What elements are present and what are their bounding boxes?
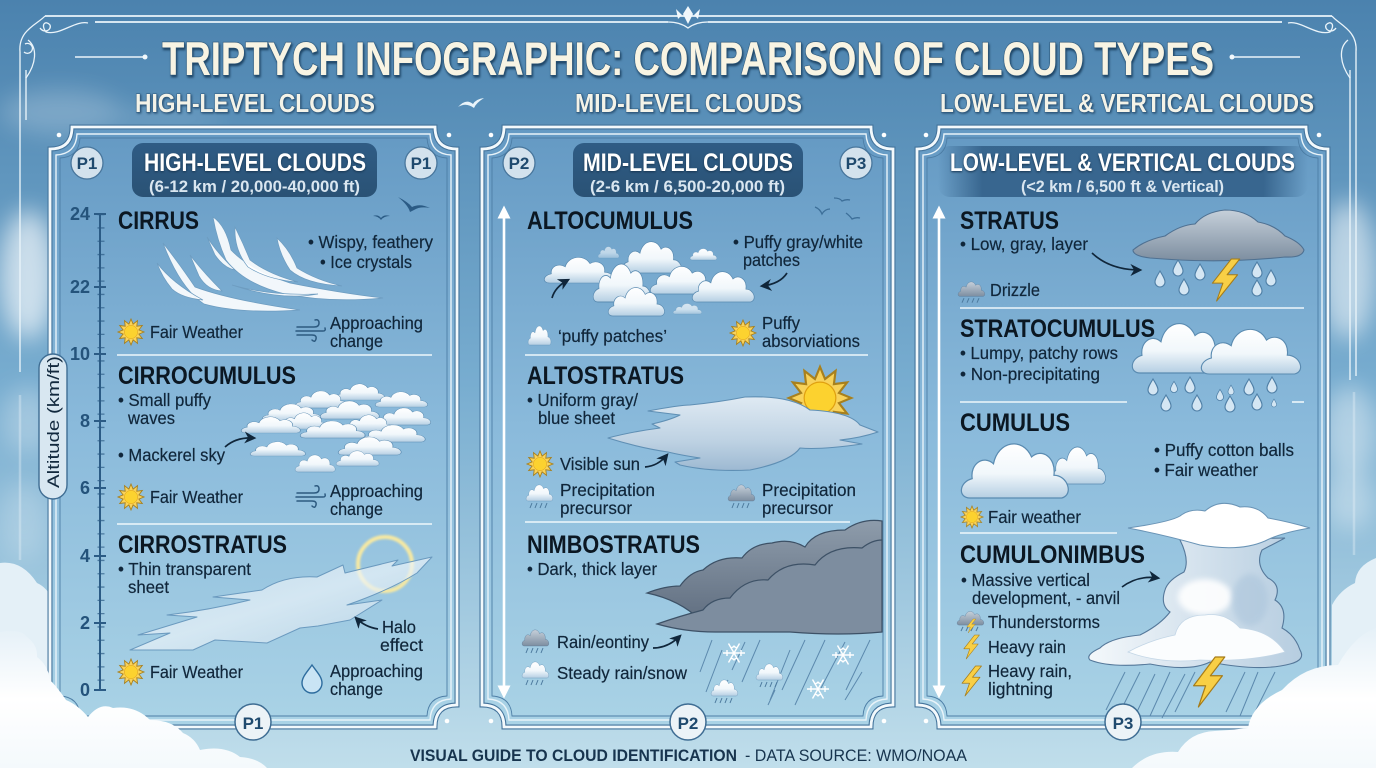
badge P2: P2: [509, 154, 529, 173]
cumulus cloud: [961, 444, 1106, 498]
cirrocumulus cloud illustration: [241, 384, 431, 472]
altostratus section: • Uniform gray/: [527, 390, 638, 410]
cirrocumulus section: • Mackerel sky: [118, 445, 225, 465]
cirrostratus section: effect: [380, 635, 423, 655]
panel header: MID-LEVEL CLOUDS: [583, 149, 793, 177]
panel header: LOW-LEVEL & VERTICAL CLOUDS: [950, 149, 1295, 177]
cirrocumulus section: change: [330, 499, 383, 519]
cirrus section: Fair Weather: [150, 322, 243, 342]
altostratus section: Visible sun: [560, 454, 640, 474]
altocumulus section: patches: [743, 250, 800, 270]
altostratus section: [526, 362, 878, 518]
badge P1 left: P1: [77, 154, 97, 173]
nimbostratus section: NIMBOSTRATUS: [527, 531, 700, 559]
nimbostratus section: Rain/eontiny: [557, 632, 649, 652]
altocumulus section: Puffy: [762, 313, 800, 333]
cirrus section: change: [330, 331, 383, 351]
frame dots and top ornament: [142, 6, 1234, 60]
cirrostratus section: [118, 531, 432, 699]
cirrostratus section: Approaching: [330, 661, 423, 681]
badge P3: [840, 147, 872, 179]
back cloud lobes behind panels: [0, 558, 1376, 700]
cumulonimbus section: Heavy rain: [988, 637, 1066, 657]
nimbostratus section: • Dark, thick layer: [527, 559, 657, 579]
rain and snow: [700, 640, 870, 705]
stratus cloud: [1133, 210, 1304, 261]
foreground clouds: bottom right: [1132, 628, 1376, 768]
icon: small bird in sky: [458, 98, 484, 108]
foreground clouds: bottom left: [0, 631, 267, 768]
panel header: [132, 143, 377, 197]
badge P3 bottom: P3: [1113, 714, 1133, 733]
altostratus section: precursor: [560, 498, 632, 518]
altocumulus section: absorviations: [762, 331, 860, 351]
nimbostratus section: [522, 520, 882, 705]
cirrostratus section: change: [330, 679, 383, 699]
panel header: (6-12 km / 20,000-40,000 ft): [149, 177, 360, 196]
cumulus section: Fair weather: [988, 507, 1081, 527]
badge P1 left: [71, 147, 103, 179]
cumulonimbus storm cloud: [1089, 503, 1310, 668]
cirrus section: • Wispy, feathery: [308, 232, 433, 252]
cirrus section: Approaching: [330, 313, 423, 333]
altitude axis: 2: [80, 613, 90, 633]
altitude axis: 24: [70, 204, 90, 224]
cirrus section: [118, 207, 433, 351]
altocumulus section: ALTOCUMULUS: [527, 207, 693, 235]
altitude axis: 4: [80, 546, 90, 566]
stratocumulus section: • Lumpy, patchy rows: [960, 343, 1118, 363]
cirrus section: • Ice crystals: [320, 252, 412, 272]
cirrostratus sheet: [130, 557, 432, 650]
footer caption: VISUAL GUIDE TO CLOUD IDENTIFICATION: [410, 746, 737, 765]
dark nimbostratus clouds: [647, 520, 882, 634]
cirrostratus section: Fair Weather: [150, 662, 243, 682]
cirrocumulus section: CIRROCUMULUS: [118, 362, 296, 390]
altitude axis: 22: [70, 277, 90, 297]
column heading: mid-level: MID-LEVEL CLOUDS: [575, 88, 802, 118]
altocumulus cloud illustration: [544, 242, 754, 316]
badge P1 right: P1: [411, 154, 431, 173]
cirrocumulus section: Fair Weather: [150, 487, 243, 507]
panel header: HIGH-LEVEL CLOUDS: [144, 149, 366, 177]
badge P3 bottom: [1105, 704, 1141, 740]
cumulonimbus section: Thunderstorms: [988, 612, 1100, 632]
cirrocumulus section: Approaching: [330, 481, 423, 501]
cirrocumulus section: waves: [127, 408, 175, 428]
panel: high-level clouds: [39, 127, 457, 740]
altitude axis: 0: [80, 680, 90, 700]
stratocumulus section: STRATOCUMULUS: [960, 315, 1155, 343]
altitude axis: 6: [80, 478, 90, 498]
raindrops: [1148, 377, 1277, 412]
stratus section: • Low, gray, layer: [960, 234, 1088, 254]
stratus section: STRATUS: [960, 207, 1059, 235]
icon: birds: [815, 198, 860, 219]
panel header: [938, 146, 1308, 197]
stratocumulus cloud: [1132, 324, 1301, 374]
cumulus section: [960, 409, 1294, 528]
cumulonimbus section: [957, 503, 1310, 718]
badge P2 bottom: P2: [678, 714, 698, 733]
cumulonimbus section: Heavy rain,: [988, 661, 1072, 681]
cirrocumulus section: [118, 362, 431, 519]
panel header: [573, 143, 803, 197]
altitude axis: 8: [80, 411, 90, 431]
altostratus sheet: [608, 397, 878, 470]
cumulus section: • Fair weather: [1154, 460, 1258, 480]
badge P1 bottom: P1: [243, 714, 263, 733]
altitude axis: [70, 204, 106, 700]
cumulonimbus section: • Massive vertical: [961, 570, 1090, 590]
altitude axis label: Altitude (km/ft): [44, 356, 63, 488]
panel header: (<2 km / 6,500 ft & Vertical): [1021, 177, 1224, 196]
altostratus section: Precipitation: [560, 480, 655, 500]
column heading: low-level: LOW-LEVEL & VERTICAL CLOUDS: [940, 88, 1314, 118]
altocumulus section: [527, 207, 863, 351]
icon: birds: [373, 197, 430, 220]
cirrocumulus section: • Small puffy: [118, 390, 211, 410]
badge P1 right: [405, 147, 437, 179]
altostratus section: blue sheet: [538, 408, 615, 428]
outer ornamental frame: [20, 16, 1356, 560]
cumulus section: • Puffy cotton balls: [1154, 440, 1294, 460]
badge P1 bottom: [235, 704, 271, 740]
column heading: high-level: HIGH-LEVEL CLOUDS: [135, 88, 375, 118]
badge P2 bottom: [670, 704, 706, 740]
cirrus cloud illustration: [157, 217, 383, 311]
large sun: [789, 367, 851, 429]
rain and lightning: [1155, 259, 1276, 301]
panel header: (2-6 km / 6,500-20,000 ft): [590, 177, 785, 196]
panel: mid-level clouds: [482, 127, 893, 740]
badge P3: P3: [846, 154, 866, 173]
altostratus section: Precipitation: [762, 480, 856, 500]
cirrostratus section: • Thin transparent: [118, 559, 251, 579]
altocumulus section: ‘puffy patches’: [558, 326, 667, 346]
cumulonimbus section: CUMULONIMBUS: [960, 541, 1145, 569]
footer caption: [410, 746, 968, 765]
altitude axis: 10: [70, 344, 90, 364]
cumulonimbus section: lightning: [988, 679, 1053, 699]
badge P2: [503, 147, 535, 179]
altostratus section: ALTOSTRATUS: [527, 362, 684, 390]
altostratus section: precursor: [762, 498, 833, 518]
cirrus section: CIRRUS: [118, 207, 199, 235]
stratocumulus section: • Non-precipitating: [960, 364, 1100, 384]
stratus section: Drizzle: [990, 280, 1040, 300]
footer caption: - DATA SOURCE: WMO/NOAA: [745, 746, 968, 765]
halo: [358, 537, 412, 591]
rain and lightning under storm: [1106, 657, 1275, 718]
cumulonimbus section: development, - anvil: [972, 588, 1120, 608]
stratocumulus section: [960, 315, 1301, 412]
altocumulus section: • Puffy gray/white: [733, 232, 863, 252]
nimbostratus section: Steady rain/snow: [557, 663, 687, 683]
cirrostratus section: CIRROSTRATUS: [118, 531, 287, 559]
vertical arrow: [938, 212, 940, 692]
cumulus section: CUMULUS: [960, 409, 1070, 437]
background clouds: [0, 90, 1376, 560]
panel: low-level and vertical clouds: [917, 127, 1328, 740]
cirrostratus section: sheet: [128, 577, 169, 597]
stratus section: [958, 207, 1304, 303]
altitude axis label: [39, 354, 67, 499]
cirrostratus section: Halo: [382, 617, 416, 637]
vertical arrow: [503, 212, 505, 692]
